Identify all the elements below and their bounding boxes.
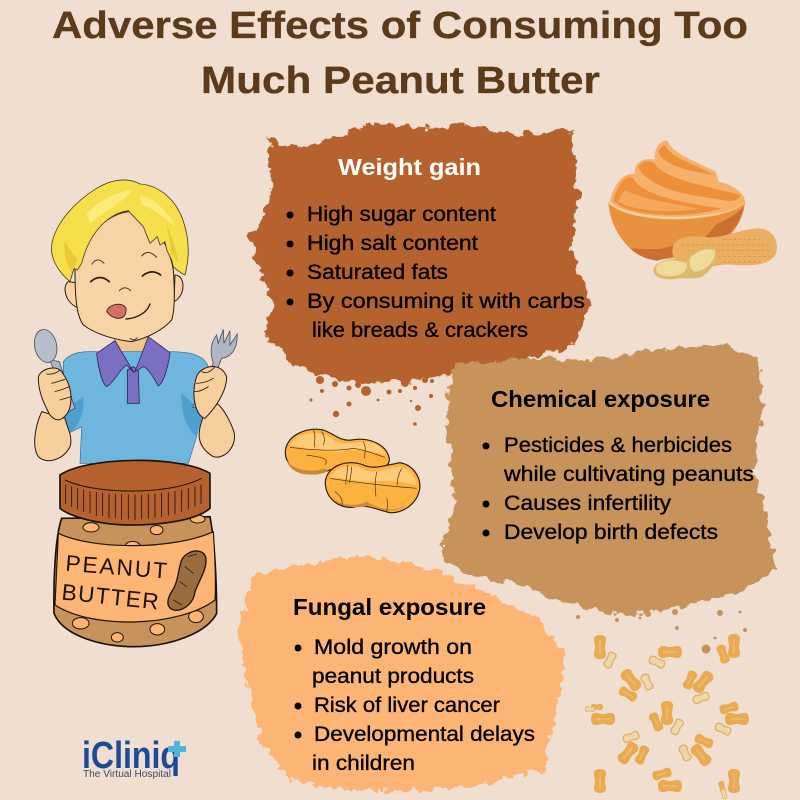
- list: weight gain: like breads & crackers: [312, 319, 528, 342]
- title: [52, 5, 748, 102]
- panel: fungal exposure: [240, 555, 565, 790]
- logo: iCliniq: The Virtual Hospital: [83, 769, 171, 780]
- heading: chemical exposure: Chemical exposure: [491, 386, 710, 412]
- list: fungal exposure: Mold growth on: [314, 636, 472, 659]
- icon: two peanuts in shell: [285, 429, 420, 513]
- icon: boy licking lips with spoon and fork: [31, 180, 237, 463]
- list: fungal exposure: [294, 636, 535, 775]
- icon: logo plus: [168, 741, 186, 757]
- list: chemical exposure: Develop birth defects: [504, 521, 718, 544]
- list: weight gain: By consuming it with carbs: [307, 290, 585, 313]
- list: fungal exposure: in children: [312, 752, 415, 775]
- icon: peanut butter jar: PEANUT: [65, 550, 168, 584]
- list: fungal exposure: Developmental delays: [314, 723, 535, 746]
- pattern: scattered small peanuts: [585, 634, 749, 799]
- list: chemical exposure: [482, 434, 754, 544]
- list: chemical exposure: while cultivating peanuts: [503, 463, 754, 486]
- title: Adverse Effects of Consuming Too: [52, 5, 748, 47]
- panel: weight gain: [250, 122, 590, 426]
- list: chemical exposure: Pesticides & herbicides: [504, 434, 732, 457]
- list: fungal exposure: Risk of liver cancer: [314, 694, 500, 717]
- list: weight gain: [286, 203, 585, 342]
- list: weight gain: High sugar content: [307, 203, 496, 226]
- icon: peanut butter jar: BUTTER: [60, 578, 160, 614]
- logo: iCliniq: iCliniq: [82, 735, 180, 777]
- panel: chemical exposure: [440, 345, 775, 654]
- icon: peanut butter jar: [54, 460, 217, 647]
- heading: weight gain: Weight gain: [338, 154, 481, 180]
- icon: bowl of peanut butter with peanut: [608, 141, 777, 279]
- list: fungal exposure: peanut products: [312, 665, 474, 688]
- list: weight gain: High salt content: [307, 232, 478, 255]
- list: weight gain: Saturated fats: [307, 261, 448, 284]
- heading: fungal exposure: Fungal exposure: [293, 594, 486, 620]
- list: chemical exposure: Causes infertility: [504, 492, 672, 515]
- title: Much Peanut Butter: [201, 60, 600, 102]
